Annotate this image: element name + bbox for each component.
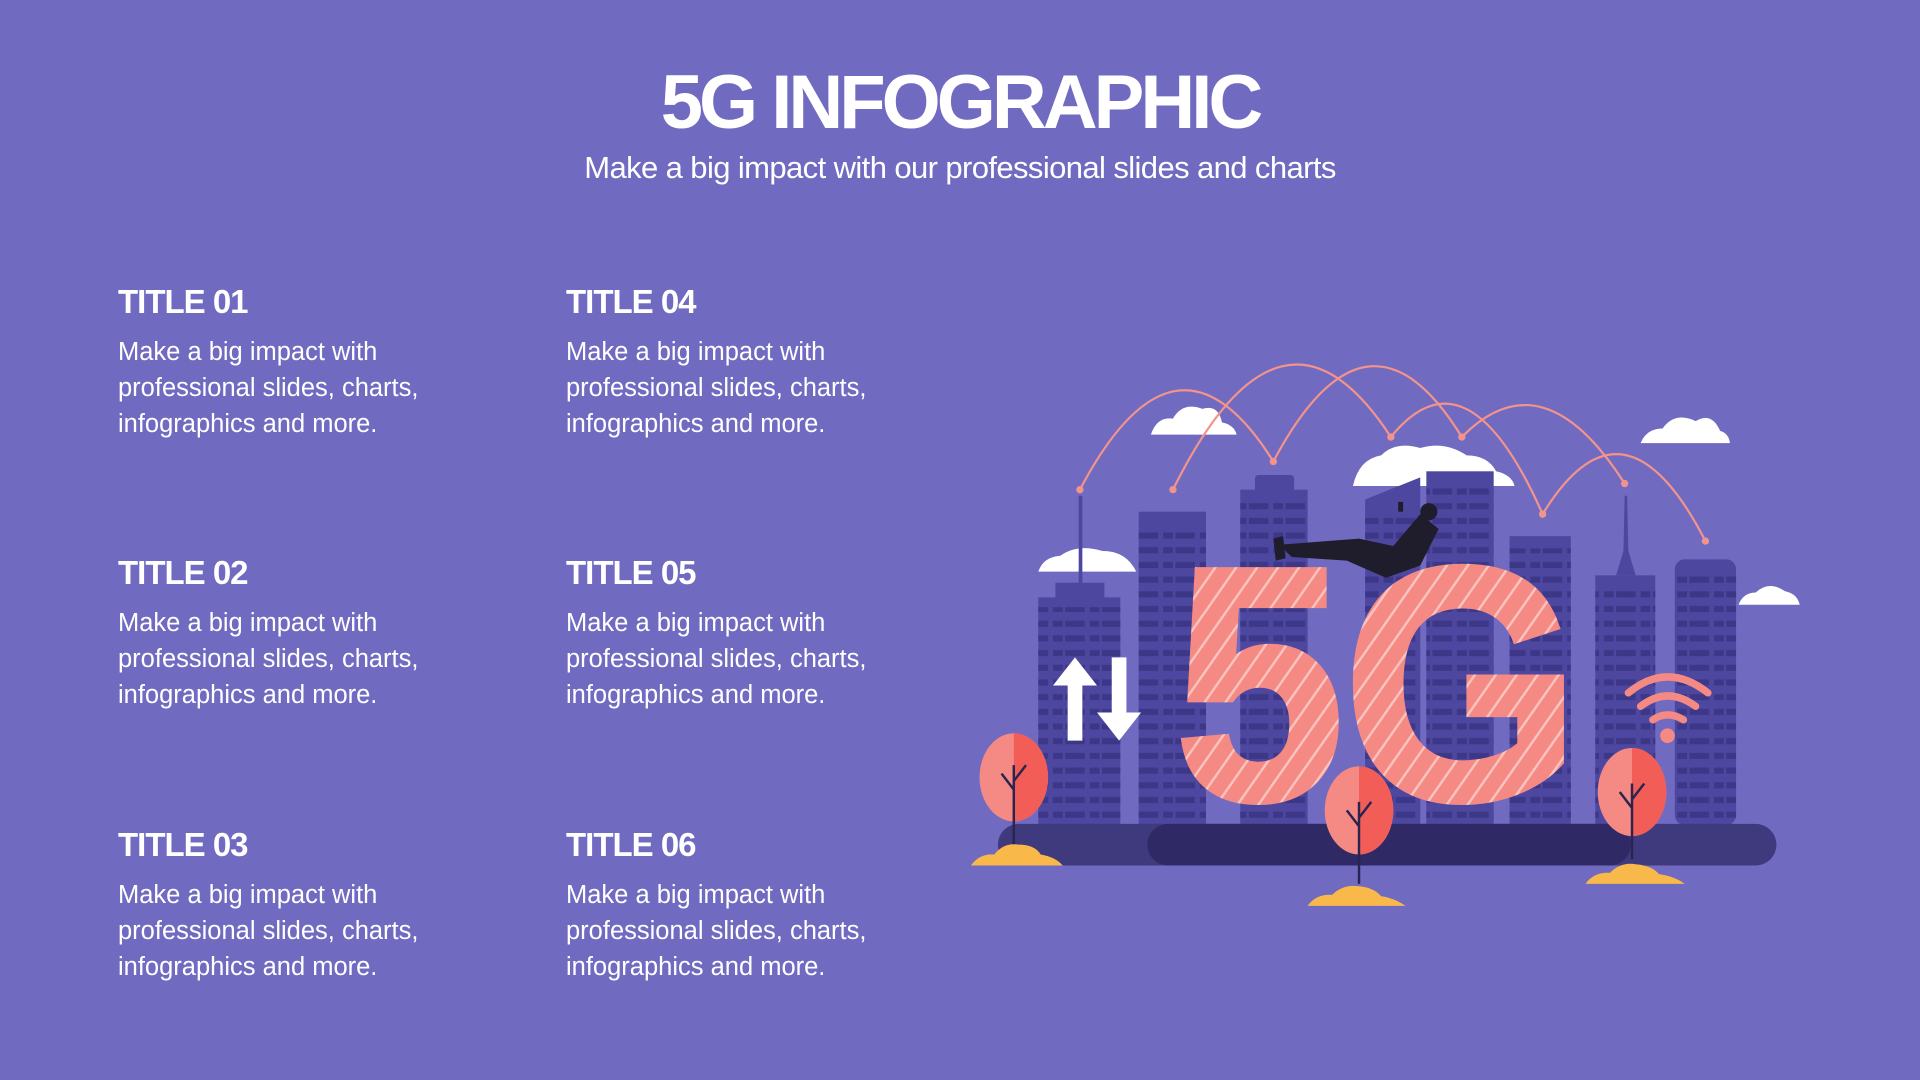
person bbox=[1273, 502, 1439, 578]
icon: wifi bbox=[1628, 677, 1708, 739]
body: title 03 bbox=[118, 881, 418, 981]
text block: title 01 bbox=[118, 283, 418, 438]
text block: title 02 bbox=[118, 554, 418, 709]
body: title 01: professional slides, charts, bbox=[118, 374, 418, 402]
body: title 05: Make a big impact with bbox=[566, 609, 825, 637]
buildings bbox=[1038, 471, 1736, 825]
trees bbox=[980, 733, 1666, 884]
body: title 06 bbox=[566, 881, 866, 981]
body: title 01 bbox=[118, 338, 418, 438]
clouds bbox=[1038, 407, 1800, 605]
body: title 04: Make a big impact with bbox=[566, 338, 825, 366]
body: title 02: infographics and more. bbox=[118, 681, 377, 709]
body: title 06: infographics and more. bbox=[566, 953, 825, 981]
body: title 03: infographics and more. bbox=[118, 953, 377, 981]
title: 5G INFOGRAPHIC bbox=[661, 60, 1259, 145]
body: title 03: Make a big impact with bbox=[118, 881, 377, 909]
text block: title 03 bbox=[118, 826, 418, 981]
body: title 03: professional slides, charts, bbox=[118, 917, 418, 945]
heading: title 02: TITLE 02 bbox=[118, 554, 248, 591]
body: title 01: Make a big impact with bbox=[118, 338, 377, 366]
icon: up/down arrows bbox=[1053, 657, 1141, 741]
illustration: 5G city bbox=[971, 363, 1800, 906]
heading: title 06: TITLE 06 bbox=[566, 826, 696, 863]
text block: title 06 bbox=[566, 826, 866, 981]
body: title 02: professional slides, charts, bbox=[118, 645, 418, 673]
text block: title 05 bbox=[566, 554, 866, 709]
body: title 04 bbox=[566, 338, 866, 438]
body: title 05: infographics and more. bbox=[566, 681, 825, 709]
body: title 02: Make a big impact with bbox=[118, 609, 377, 637]
body: title 06: Make a big impact with bbox=[566, 881, 825, 909]
body: title 04: professional slides, charts, bbox=[566, 374, 866, 402]
heading: title 01: TITLE 01 bbox=[118, 283, 248, 320]
body: title 05 bbox=[566, 609, 866, 709]
body: title 01: infographics and more. bbox=[118, 410, 377, 438]
body: title 06: professional slides, charts, bbox=[566, 917, 866, 945]
bushes bbox=[971, 844, 1685, 906]
heading: title 03: TITLE 03 bbox=[118, 826, 248, 863]
signal arcs bbox=[1076, 365, 1709, 545]
text block: title 04 bbox=[566, 283, 866, 438]
heading: title 05: TITLE 05 bbox=[566, 554, 696, 591]
body: title 02 bbox=[118, 609, 418, 709]
subtitle: Make a big impact with our professional slides and charts bbox=[584, 150, 1336, 185]
ground bbox=[998, 824, 1776, 865]
body: title 04: infographics and more. bbox=[566, 410, 825, 438]
heading: title 04: TITLE 04 bbox=[566, 283, 696, 320]
5G letters: 5G bbox=[1175, 500, 1579, 869]
body: title 05: professional slides, charts, bbox=[566, 645, 866, 673]
